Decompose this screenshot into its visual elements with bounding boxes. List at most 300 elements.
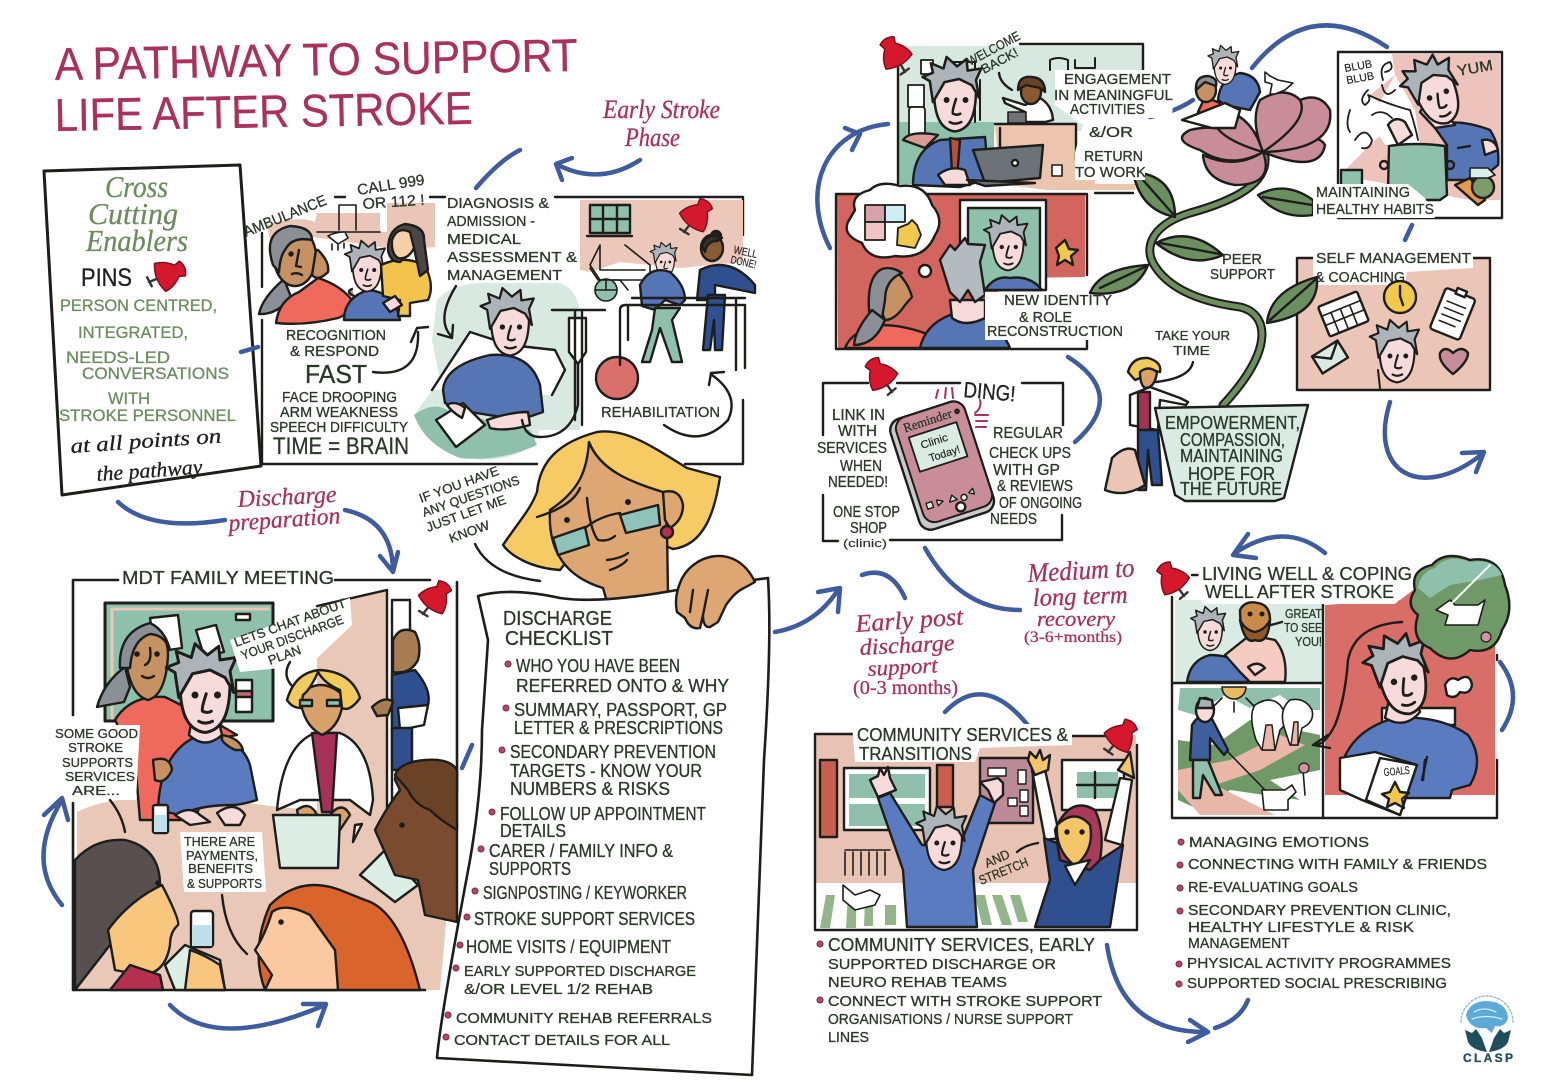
panel: new identity: [836, 184, 1125, 349]
icon: star: [1056, 240, 1078, 265]
window left: [844, 768, 930, 830]
arrow: link to identity: [1068, 357, 1100, 442]
text: well done: DONE!: [729, 254, 757, 271]
speech bubble: any questions: IF YOU HAVE: [417, 463, 501, 506]
icon: pin: [873, 31, 918, 80]
speech bubble: lets chat: LETS CHAT ABOUT: [232, 595, 348, 650]
text: engagement: [1054, 70, 1175, 181]
heading highlight: [1197, 562, 1415, 604]
icon: phone with reminder: Clinic: [919, 432, 950, 452]
text: diagnosis: [447, 195, 577, 284]
checklist item: referred: REFERRED ONTO & WHY: [516, 676, 729, 696]
speech bubble: some good: ARE...: [72, 783, 120, 798]
icon: heart: [1440, 349, 1468, 374]
person: physiotherapist: [697, 231, 755, 350]
text: diagnosis: DIAGNOSIS &: [447, 195, 549, 212]
text: community services bullets: SUPPORTED DISCHARGE OR: [828, 956, 1056, 973]
heading: medium to long term: recovery: [1037, 606, 1115, 631]
text: engagement: TO WORK: [1075, 164, 1146, 181]
text: welcome back: BACK!: [978, 45, 1021, 77]
frame: [1338, 52, 1502, 218]
icon: calendar: [1318, 291, 1369, 337]
text: regular check ups: REGULAR: [993, 425, 1063, 442]
text: great to see you: YOU!: [1295, 634, 1322, 649]
checklist item: early supported: [453, 963, 696, 998]
frame: [898, 44, 1143, 193]
text highlight: [985, 292, 1125, 340]
icon: vegetables: [1455, 168, 1495, 205]
arrows: around MDT panel: [44, 745, 472, 1028]
panel: maintaining healthy habits: [1313, 48, 1502, 218]
park scene: [1175, 685, 1323, 816]
icon: pin: [672, 192, 720, 241]
person: patient at home: [344, 240, 400, 320]
speech bubble: some good: SUPPORTS: [62, 755, 133, 770]
text: recognition: FAST: [305, 359, 367, 389]
background: home wall: [267, 203, 435, 250]
background: table and wall: [77, 797, 457, 990]
plant pot: HOPE FOR: [1188, 464, 1275, 484]
text: ambulance: AMBULANCE: [241, 192, 329, 241]
person: large nurse: [503, 431, 720, 602]
heading: early post discharge: [853, 603, 965, 699]
speech bubble: payments: PAYMENTS,: [186, 848, 258, 863]
mirror: [960, 200, 1046, 290]
checklist item: early supported: EARLY SUPPORTED DISCHARGE: [464, 963, 696, 980]
speech: take your time: [1155, 328, 1230, 382]
icon: mug: [1052, 165, 1062, 176]
radiator: [845, 850, 890, 875]
icon: parallel bars: [620, 298, 745, 370]
notice board: [105, 603, 273, 721]
heading: early stroke phase: [602, 95, 720, 152]
plant pot: EMPOWERMENT,: [1165, 413, 1300, 433]
background: door: [317, 590, 387, 820]
icon: phone with reminder: Today!: [928, 444, 962, 465]
thought bubble: dog walk: [1411, 556, 1509, 659]
speech bubble: payments: THERE ARE: [184, 834, 255, 849]
text: community services bullets: COMMUNITY SERVICES, EARLY: [828, 935, 1095, 955]
text: recognition: TIME = BRAIN: [273, 433, 409, 460]
panel: MDT family meeting: [50, 568, 459, 990]
worktop: [1341, 170, 1362, 200]
flower petals: [1182, 92, 1330, 185]
text: welcome back: [964, 28, 1023, 90]
speech bubble: payments: & SUPPORTS: [187, 876, 262, 891]
text: engagement: ACTIVITIES: [1070, 101, 1145, 118]
text: regular check ups: OF ONGOING: [999, 495, 1082, 512]
text: well done: WELL: [732, 244, 758, 261]
text: new identity: RECONSTRUCTION: [987, 323, 1123, 340]
person: walking patient: [640, 242, 685, 362]
person: family member with curly hair: [375, 760, 457, 922]
panel: cross cutting enablers: INTEGRATED,: [78, 323, 188, 342]
text: regular check ups: CHECK UPS: [989, 445, 1071, 462]
text: new identity: [987, 292, 1123, 340]
icon: pin: [1150, 556, 1196, 605]
panel: link in with services: [817, 352, 1082, 550]
text: living well bullets: PHYSICAL ACTIVITY PROGRAMMES: [1187, 955, 1451, 972]
person: cooking man: [1388, 48, 1498, 180]
text: recognition: [270, 327, 409, 460]
arrows: living well: [1233, 534, 1513, 730]
small thought cloud: [1445, 677, 1472, 697]
background: rehabilitation wall: [580, 200, 743, 272]
speech bubble: some good: SERVICES: [65, 769, 135, 784]
text: link in: SHOP: [850, 520, 887, 537]
text: link in: LINK IN: [832, 407, 885, 424]
frame: [836, 194, 1087, 349]
panel: cross cutting enablers: PERSON CENTRED,: [60, 296, 217, 315]
text: link in: SERVICES: [817, 440, 887, 457]
panel: cross cutting enablers: Cutting: [88, 196, 178, 231]
icon: clipboard: [1430, 284, 1477, 340]
person: woman in mirror scene: [845, 268, 955, 348]
text highlight: [1313, 248, 1473, 285]
text: blub: BLUB: [1345, 70, 1375, 87]
heading: medium to long term: Medium to: [1026, 552, 1135, 588]
icon: red exercise ball: [596, 357, 638, 399]
text: link in: ONE STOP: [833, 504, 900, 521]
arrow: diagnosis to bed: [438, 286, 456, 338]
person: helper in yellow: [381, 224, 431, 316]
text: living well bullets: MANAGING EMOTIONS: [1189, 834, 1369, 851]
plant pot: MAINTAINING: [1180, 446, 1283, 466]
text: community services bullets: NEURO REHAB TEAMS: [828, 974, 1007, 991]
checklist item: summary: [503, 700, 727, 738]
speech bubble: lets chat: YOUR DISCHARGE: [239, 612, 346, 663]
checklist item: summary: SUMMARY, PASSPORT, GP: [514, 700, 727, 720]
person: patient with goals book: [1340, 628, 1477, 815]
heading: medium to long term: (3-6+months): [1024, 629, 1122, 646]
heading: early post discharge: (0-3 months): [853, 677, 958, 699]
speech bubble: some good: [50, 725, 140, 832]
text: new identity: NEW IDENTITY: [1004, 292, 1112, 309]
text: welcome back: WELCOME: [964, 28, 1023, 69]
text: community services bullets: [817, 935, 1102, 1046]
speech bubble: payments: BENEFITS: [188, 861, 253, 876]
background: hospital bed: [414, 283, 580, 460]
leaves: [1090, 172, 1313, 294]
thought cloud: puzzle: [847, 184, 939, 257]
text: living well bullets: HEALTHY LIFESTYLE & RISK: [1188, 919, 1414, 936]
text: new identity: & ROLE: [1019, 309, 1072, 326]
glass foreground: [191, 911, 213, 947]
icon: phone with reminder: Reminder: [901, 405, 954, 435]
speech bubble: lets chat: PLAN: [266, 642, 303, 668]
text highlight: [1313, 184, 1435, 218]
text: engagement: &/OR: [1089, 124, 1133, 141]
heading: discharge preparation: preparation: [226, 503, 341, 537]
person: caller with phone: [259, 226, 352, 324]
checklist item: follow up: FOLLOW UP APPOINTMENT: [500, 804, 706, 824]
papers on table: [165, 815, 418, 990]
speech: take your time: TAKE YOUR: [1155, 328, 1230, 343]
panel: discharge checklist: CHECKLIST: [505, 628, 613, 650]
person: nurse at door: [372, 630, 429, 770]
text: living well bullets: [1176, 834, 1487, 992]
arrow: rehabilitation loop: [664, 372, 732, 436]
icon: cooking pot: [1380, 144, 1454, 200]
text: and stretch: STRETCH: [977, 854, 1030, 888]
checklist item: prevention: [499, 742, 716, 799]
text: peer support: SUPPORT: [1210, 266, 1275, 283]
speech bubble: any questions: JUST LET ME: [424, 492, 508, 535]
checklist item: referred: WHO YOU HAVE BEEN: [516, 656, 680, 676]
checklist item: prevention: TARGETS - KNOW YOUR: [510, 761, 702, 781]
arrow: enablers to pathway: [241, 347, 258, 352]
logo: CLASP: CLASP: [1463, 1051, 1513, 1065]
panel: cross cutting enablers: PINS: [81, 264, 132, 292]
speech bubble: any questions: KNOW: [447, 517, 492, 546]
plant pot: THE FUTURE: [1180, 479, 1282, 499]
person: reflection: [984, 215, 1042, 290]
text: link in: [817, 407, 900, 550]
arrow: community to living well: [1107, 945, 1248, 1042]
panel: living well and coping: WELL AFTER STROKE: [1205, 582, 1394, 602]
title highlight: [852, 724, 1072, 762]
checklist item: community: COMMUNITY REHAB REFERRALS: [456, 1010, 712, 1027]
title: LIFE AFTER STROKE: [54, 82, 473, 141]
speech bubble: some good: STROKE: [68, 740, 123, 755]
frame: [73, 580, 457, 990]
heading: early post discharge: Early post: [853, 603, 965, 638]
notice board: [980, 758, 1033, 823]
text: yum: YUM: [1456, 57, 1494, 80]
person: small doctor: [1105, 358, 1188, 493]
person: doctor: [277, 670, 373, 830]
text: peer support: PEER: [1222, 251, 1262, 268]
text: living well bullets: SUPPORTED SOCIAL PRESCRIBING: [1187, 975, 1447, 992]
arrows: to community: [775, 548, 1030, 728]
icon: face: [1370, 320, 1419, 388]
text: engagement: IN MEANINGFUL: [1054, 87, 1173, 104]
panel: community services: COMMUNITY SERVICES &: [857, 725, 1068, 745]
text: link in: WITH: [838, 423, 877, 440]
floor rug: [820, 895, 1028, 928]
panel: cross cutting enablers: at all points on: [70, 424, 222, 458]
leaf: self management: [1267, 277, 1317, 323]
person: stretching patient: [870, 767, 1003, 927]
icon: pin: [1097, 713, 1144, 762]
doorway: [945, 58, 1095, 122]
checklist item: summary: LETTER & PRESCRIPTIONS: [514, 718, 723, 738]
window right: [1062, 760, 1124, 810]
text: great to see you: [1271, 606, 1322, 649]
icon: phone with reminder: [887, 398, 997, 533]
checklist item: carer: CARER / FAMILY INFO &: [489, 841, 673, 861]
text: call 999: [356, 172, 426, 213]
checklist item: prevention: NUMBERS & RISKS: [510, 779, 670, 799]
text: link in: (clinic): [843, 538, 887, 550]
arrows: engagement: [817, 25, 1412, 248]
checklist item: home visits: HOME VISITS / EQUIPMENT: [466, 937, 671, 957]
text: self management: & COACHING: [1315, 269, 1405, 286]
text: community services bullets: LINES: [828, 1029, 869, 1046]
text: diagnosis: ASSESSMENT &: [447, 249, 577, 266]
people greeting: [1187, 602, 1286, 682]
panel: cross cutting enablers: Enablers: [85, 223, 188, 258]
text: call 999: OR 112 !: [362, 192, 425, 213]
text: peer support: [1210, 251, 1275, 283]
alert marks: [936, 388, 988, 427]
heading: MDT FAMILY MEETING: [122, 568, 334, 588]
panel: discharge checklist: DISCHARGE: [503, 608, 612, 630]
cat on flower: [1265, 72, 1293, 94]
heading: discharge preparation: [226, 482, 341, 537]
panel: discharge checklist: [437, 578, 769, 1075]
text: community services bullets: CONNECT WITH STROKE SUPPORT: [828, 993, 1102, 1010]
desk: [995, 124, 1135, 190]
checklist item: early supported: &/OR LEVEL 1/2 REHAB: [464, 981, 653, 998]
text: living well bullets: MANAGEMENT: [1188, 935, 1290, 952]
text: regular check ups: & REVIEWS: [997, 478, 1073, 495]
panel: cross cutting enablers: the pathway: [96, 455, 204, 486]
background: red wall: [1325, 585, 1495, 795]
text: living well bullets: CONNECTING WITH FAMILY & FRIENDS: [1188, 856, 1487, 873]
text: rehabilitation: REHABILITATION: [601, 404, 720, 421]
title: A PATHWAY TO SUPPORT: [54, 29, 578, 90]
frame: [1172, 575, 1497, 818]
checklist item: carer: [478, 841, 673, 879]
panel: living well and coping: [1150, 556, 1509, 818]
heading: early post discharge: discharge: [859, 630, 955, 660]
glass: [153, 805, 168, 833]
text: recognition: ARM WEAKNESS: [280, 404, 398, 421]
panel: self management and coaching: [1297, 248, 1490, 390]
title: [54, 29, 578, 141]
icon: hospital bed and patient: [414, 288, 565, 459]
text: blub: [1343, 58, 1375, 87]
panel: cross cutting enablers: CONVERSATIONS: [82, 364, 229, 383]
heading: medium to long term: [1024, 552, 1135, 646]
text: living well bullets: RE-EVALUATING GOALS: [1188, 879, 1358, 896]
text: self management: SELF MANAGEMENT: [1316, 250, 1471, 267]
person: family member with red hair: [255, 885, 420, 990]
text: healthy habits: [1316, 184, 1434, 218]
text: self management: [1315, 250, 1471, 286]
text: regular check ups: NEEDS: [990, 511, 1037, 528]
icon: window: [587, 205, 632, 236]
text: link in: WHEN: [840, 458, 882, 475]
checklist item: prevention: SECONDARY PREVENTION: [510, 742, 716, 762]
icon: pin: [858, 352, 904, 400]
checklist item: contact: CONTACT DETAILS FOR ALL: [454, 1032, 670, 1049]
icon: door and dog: [317, 205, 380, 250]
person: physiotherapist stretching: [1028, 750, 1134, 927]
person: patient with goals book: GOALS: [1383, 765, 1410, 779]
panel: cross cutting enablers: Cross: [105, 169, 168, 204]
panel: cross cutting enablers: STROKE PERSONNEL: [59, 406, 236, 425]
logo: CLASP: [1461, 996, 1513, 1065]
text: great to see you: GREAT: [1285, 606, 1322, 621]
plant pot: COMPASSION,: [1180, 430, 1285, 450]
person: patient in blue: [153, 644, 257, 825]
text: living well bullets: SECONDARY PREVENTION CLINIC,: [1188, 902, 1451, 919]
cat: [843, 885, 880, 910]
text: diagnosis: ADMISSION -: [447, 213, 535, 230]
panel: cross cutting enablers: NEEDS-LED: [66, 348, 170, 367]
icon: stairs and wheelchair: [590, 245, 650, 301]
checklist item: referred: [505, 656, 729, 696]
text: healthy habits: MAINTAINING: [1316, 184, 1410, 201]
icon: pin: [411, 574, 459, 623]
icon: water cooler: [908, 60, 933, 137]
hand holding checklist: [676, 556, 755, 628]
text: engagement: RETURN: [1084, 148, 1143, 165]
arrow: early stroke phase: [476, 150, 640, 188]
text: well done: [729, 244, 758, 271]
panel: community services: [815, 713, 1144, 930]
people on flower: [1182, 45, 1260, 128]
curtains: [820, 760, 953, 837]
icon: clock: [1384, 281, 1416, 313]
checklist item: support services: STROKE SUPPORT SERVICES: [474, 909, 695, 929]
arrow: thought to park: [1313, 622, 1402, 748]
speech bubble: lets chat: [230, 595, 352, 686]
panel: cross cutting enablers: WITH: [108, 389, 150, 408]
panel: engagement and return to work: [873, 28, 1143, 193]
heading: discharge preparation: Discharge: [236, 482, 338, 513]
icon: envelope: [1312, 341, 1348, 373]
text: recognition: & RESPOND: [290, 343, 379, 360]
icon: laptop: [967, 145, 1043, 186]
text: call 999: CALL 999: [356, 172, 426, 199]
text: regular check ups: WITH GP: [993, 462, 1060, 479]
text: healthy habits: HEALTHY HABITS: [1316, 201, 1434, 218]
person: man at laptop: [903, 57, 986, 187]
speech bubble: payments: [180, 832, 266, 954]
text: blub: BLUB: [1343, 58, 1373, 75]
icon: drip stand: [522, 310, 605, 437]
person: woman in coral: [97, 623, 237, 820]
speech bubble: any questions: ANY QUESTIONS: [420, 472, 522, 520]
checklist item: signposting: SIGNPOSTING / KEYWORKER: [483, 883, 687, 903]
arrow: discharge preparation: [118, 502, 398, 572]
plant stem: [1150, 157, 1265, 405]
text: regular check ups: [989, 425, 1082, 528]
text: ding: DING!: [963, 377, 1017, 407]
person: man from behind: [920, 238, 1010, 348]
text: great to see you: TO SEE: [1284, 620, 1322, 635]
speech: take your time: TIME: [1173, 343, 1210, 358]
text: diagnosis: MEDICAL: [447, 231, 521, 248]
arrow: self management onward: [1385, 402, 1484, 478]
speech bubble: any questions: [417, 463, 540, 581]
small thought cloud: [919, 265, 931, 277]
text: diagnosis: MANAGEMENT: [447, 267, 562, 284]
plant pot: [1155, 405, 1308, 501]
panel: living well and coping: LIVING WELL & COPING: [1202, 564, 1412, 584]
arrow: fast to bed: [373, 327, 428, 373]
heading: early stroke phase: Early Stroke: [602, 95, 720, 124]
text: and stretch: AND: [982, 846, 1012, 871]
steam swirls: [1348, 62, 1418, 148]
person: receptionist: [1003, 77, 1053, 123]
text: recognition: SPEECH DIFFICULTY: [270, 419, 408, 436]
panel: community services: TRANSITIONS: [859, 744, 972, 764]
heading: early post discharge: support: [867, 652, 939, 681]
checklist item: follow up: DETAILS: [500, 821, 566, 841]
text: recognition: FACE DROOPING: [282, 389, 397, 406]
heading: medium to long term: long term: [1032, 582, 1128, 612]
panel: flower plant: [1090, 45, 1330, 501]
text: engagement: ENGAGEMENT: [1064, 71, 1171, 88]
checklist item: follow up: [489, 804, 706, 841]
panel: early stroke care: [241, 172, 758, 464]
panel: cross cutting enablers: [44, 165, 261, 495]
heading: early stroke phase: Phase: [624, 123, 680, 152]
